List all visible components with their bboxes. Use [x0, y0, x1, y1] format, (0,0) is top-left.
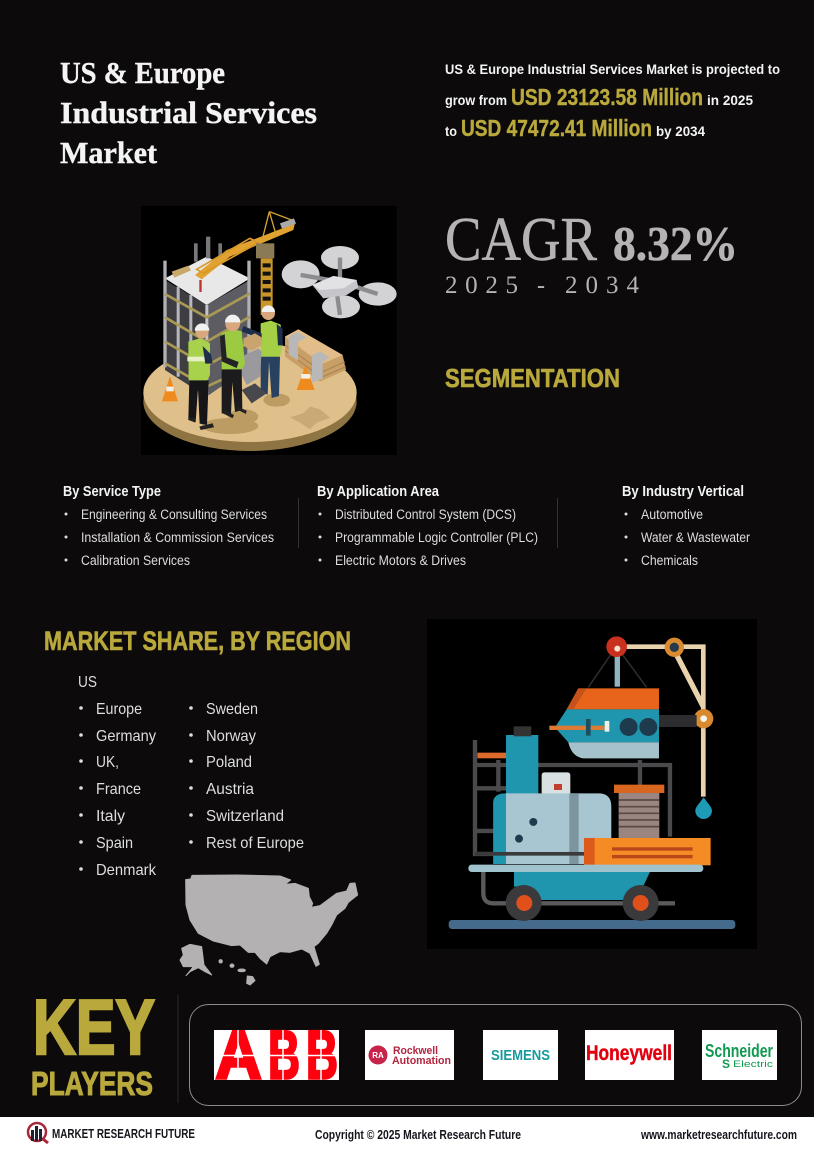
region list: UK, — [96, 754, 119, 771]
CAGR years: 2025 — [445, 272, 518, 299]
heading: segmentation: SEGMENTATION — [445, 363, 620, 393]
projection text: grow from — [445, 92, 507, 108]
illustration: construction site with drone — [141, 206, 397, 455]
region list: France — [96, 781, 141, 798]
projection text: by 2034 — [656, 123, 705, 139]
projection text: to — [445, 123, 457, 139]
projection text: in 2025 — [707, 92, 753, 108]
disc base — [143, 343, 357, 451]
CAGR years: 2034 — [565, 272, 640, 299]
region list: US — [78, 674, 97, 691]
CAGR years — [445, 272, 640, 299]
logo: Schneider Electric — [702, 1030, 777, 1080]
footer: MARKET RESEARCH FUTURE — [52, 1126, 195, 1141]
US map — [180, 875, 358, 985]
rail — [449, 920, 735, 929]
segment: by application area: Electric Motors & Drives — [335, 553, 466, 568]
segment: by application area — [317, 483, 538, 568]
region list: Norway — [206, 728, 256, 745]
frame — [475, 740, 670, 854]
logo: Honeywell: Honeywell — [586, 1042, 672, 1065]
cart — [468, 865, 703, 921]
arm — [588, 636, 713, 819]
CAGR: CAGR — [445, 206, 598, 274]
carried box and equipment — [242, 333, 267, 403]
region list: Poland — [206, 754, 252, 771]
segment: by application area: Distributed Control System (DCS) — [335, 507, 516, 522]
region list: Austria — [206, 781, 254, 798]
CAGR years: - — [537, 272, 545, 299]
segment: by industry vertical: Water & Wastewater — [641, 530, 750, 545]
CAGR — [445, 206, 738, 274]
logo: Schneider Electric: Electric — [733, 1059, 774, 1069]
region list: Sweden — [206, 701, 258, 718]
region list: Germany — [96, 728, 156, 745]
title: Market — [60, 135, 158, 170]
footer: Copyright © 2025 Market Research Future — [315, 1127, 521, 1142]
region list: Europe — [96, 701, 142, 718]
logo: Schneider Electric: S — [722, 1057, 730, 1071]
region list: Switzerland — [206, 808, 284, 825]
segment: by application area: Programmable Logic Controller (PLC) — [335, 530, 538, 545]
title: US & Europe — [60, 55, 225, 90]
region list: Spain — [96, 835, 133, 852]
logo: ABB: A — [215, 1016, 262, 1094]
orange box — [584, 838, 711, 865]
worker center — [220, 315, 247, 418]
logo: ABB — [214, 1016, 339, 1094]
cones — [162, 365, 315, 401]
footer logo icon — [28, 1123, 48, 1143]
logo: Schneider Electric: Schneider — [705, 1041, 773, 1061]
building — [163, 237, 251, 398]
title — [60, 55, 317, 170]
region list: Rest of Europe — [206, 835, 304, 852]
segment: by industry vertical — [622, 483, 750, 568]
coil — [614, 785, 664, 838]
drone — [282, 246, 397, 318]
tank — [506, 726, 570, 796]
segment: by service type: By Service Type — [63, 483, 161, 500]
logo: Siemens — [483, 1030, 558, 1080]
key players panel — [190, 1004, 802, 1106]
key players heading — [31, 983, 155, 1102]
generator — [475, 793, 611, 864]
projection text: US & Europe Industrial Services Market is projected to — [445, 61, 780, 77]
footer — [0, 1117, 814, 1150]
projection text: USD 23123.58 Million — [511, 84, 703, 110]
key players heading: PLAYERS — [31, 1065, 153, 1102]
logo: Siemens: SIEMENS — [491, 1047, 550, 1064]
illustration: industrial machine on cart — [427, 619, 757, 949]
machine head — [549, 688, 659, 758]
segment: by industry vertical: By Industry Vertical — [622, 483, 744, 500]
worker right — [242, 305, 283, 398]
projection text: USD 47472.41 Million — [461, 115, 652, 141]
projection text — [445, 61, 780, 141]
segment: by service type: Installation & Commission Services — [81, 530, 274, 545]
segment: by service type: Calibration Services — [81, 553, 190, 568]
boxes — [285, 329, 346, 383]
logo: Rockwell Automation: RA — [372, 1051, 384, 1060]
logo: Honeywell — [585, 1030, 674, 1080]
segment: by industry vertical: Automotive — [641, 507, 703, 522]
crane — [195, 212, 296, 315]
region list: Denmark — [96, 862, 157, 879]
logo: ABB: B — [306, 1016, 338, 1094]
logo: ABB: B — [268, 1016, 300, 1094]
region list: Italy — [96, 808, 125, 825]
worker left — [187, 323, 214, 430]
segment: by industry vertical: Chemicals — [641, 553, 698, 568]
logo: Rockwell Automation: Automation — [392, 1055, 451, 1067]
title: Industrial Services — [60, 95, 317, 130]
segment: by application area: By Application Area — [317, 483, 440, 500]
key players heading: KEY — [33, 983, 155, 1071]
logo: Rockwell Automation — [365, 1030, 454, 1080]
segment: by service type — [63, 483, 274, 568]
segment: by service type: Engineering & Consulting Services — [81, 507, 267, 522]
CAGR: 8.32% — [613, 216, 738, 271]
logo: Rockwell Automation: Rockwell — [393, 1045, 438, 1057]
region list — [78, 674, 304, 879]
heading: market share: MARKET SHARE, BY REGION — [44, 626, 351, 656]
